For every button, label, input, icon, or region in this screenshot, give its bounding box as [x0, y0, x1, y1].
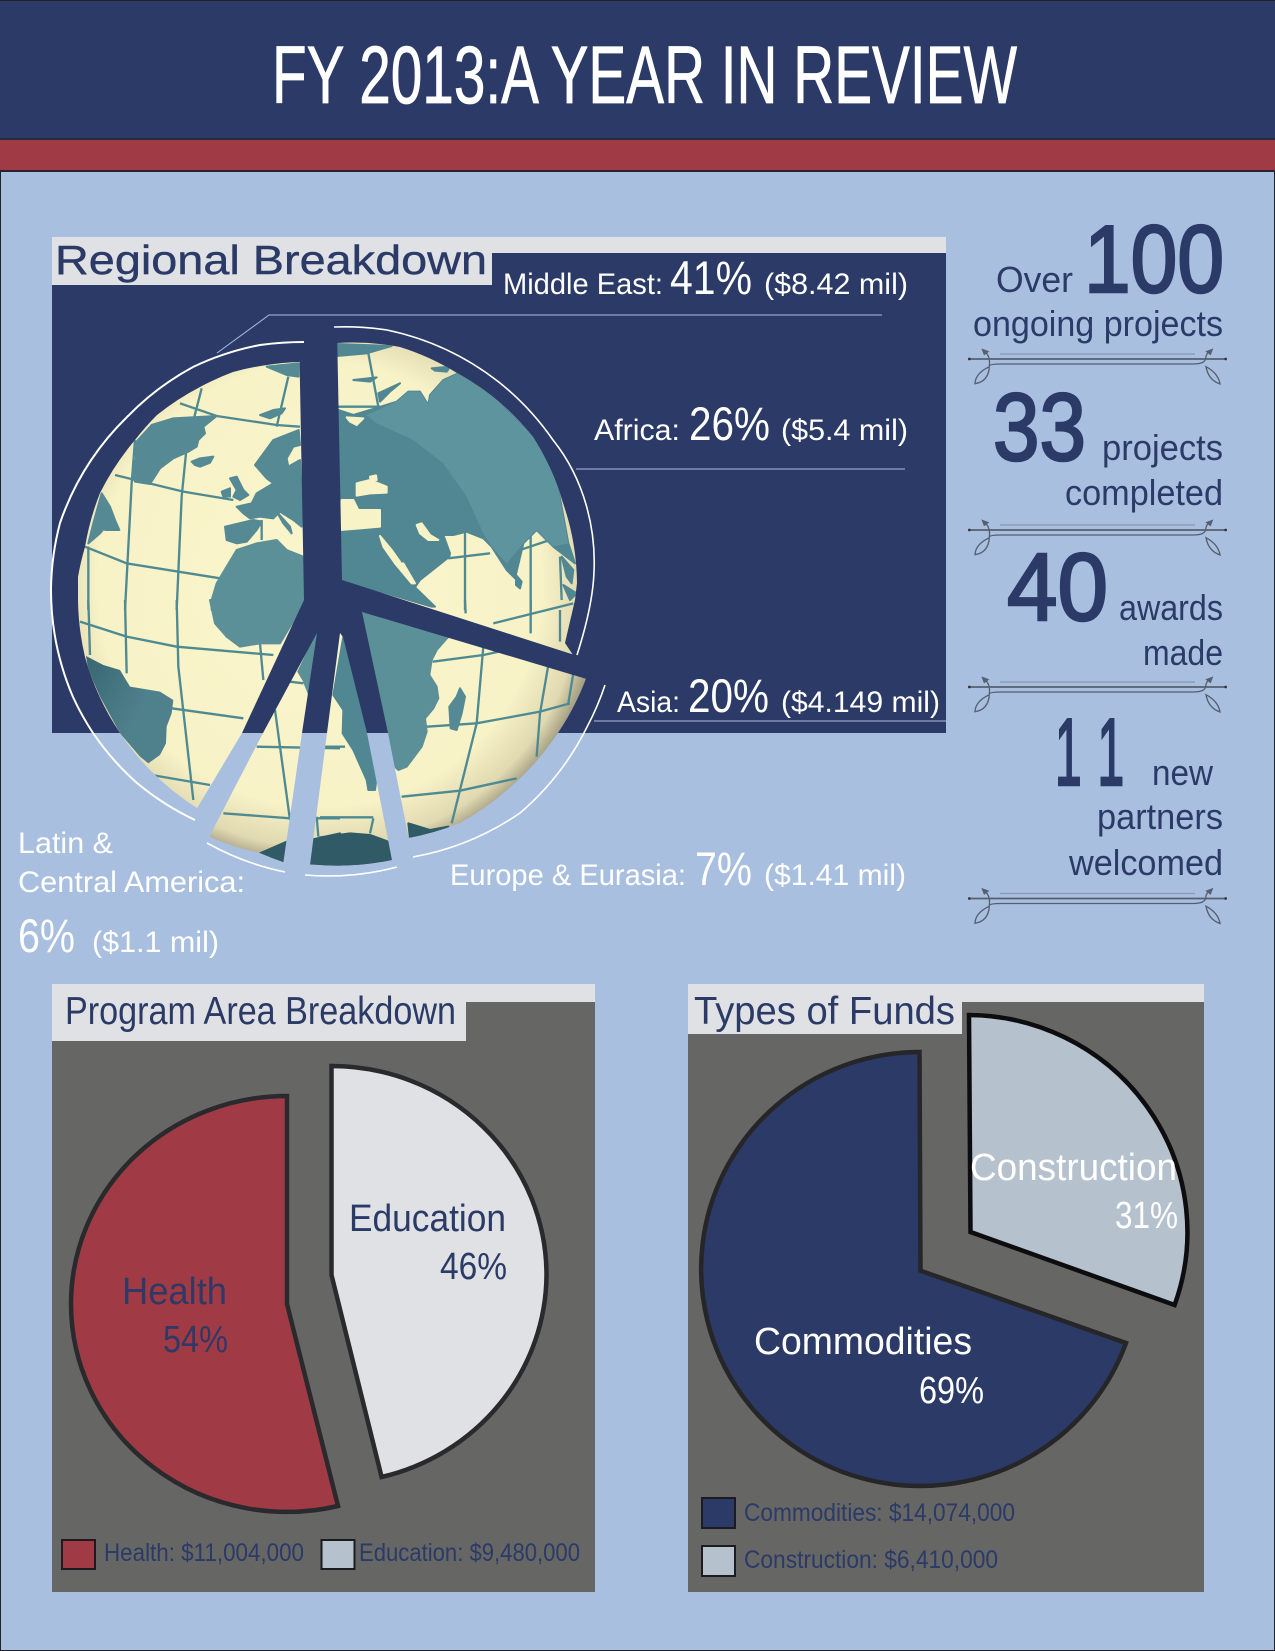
divider flourish 3: [968, 676, 1227, 712]
label: Latin and Central America: [18, 827, 245, 962]
divider flourish 1: [968, 348, 1227, 384]
pie slice: commodities: [701, 1052, 1126, 1486]
pie label: commodities: 69%: [919, 1370, 984, 1412]
divider flourish 4: [968, 888, 1227, 923]
label: Middle East: Middle East:: [503, 268, 663, 301]
legend: commodities: Commodities: $14,074,000: [744, 1499, 1015, 1527]
label: Africa: 26%: [689, 397, 770, 450]
divider flourish 2: [968, 519, 1227, 555]
pie label: construction: [970, 1147, 1178, 1237]
pie slice: health: [71, 1096, 338, 1512]
legend: construction: Construction: $6,410,000: [744, 1546, 998, 1574]
pie label: health: [122, 1271, 228, 1361]
label: Asia: ($4.149 mil): [781, 686, 940, 719]
legend: education: Education: $9,480,000: [359, 1539, 580, 1567]
label: Africa: ($5.4 mil): [781, 414, 908, 447]
pie label: construction: Construction: [970, 1147, 1177, 1189]
label: Middle East: 41%: [670, 251, 752, 304]
label: Europe and Eurasia: [450, 842, 906, 895]
callout lines: [18, 315, 946, 962]
stat: 11 new partners welcomed: [1055, 699, 1223, 883]
stat: 33 projects completed: [993, 374, 1223, 513]
label: Europe and Eurasia: Europe & Eurasia:: [450, 859, 686, 892]
legend: health: Health: $11,004,000: [104, 1539, 304, 1567]
stat: 33 projects completed: projects: [1102, 427, 1223, 468]
label: Latin and Central America: ($1.1 mil): [92, 926, 219, 959]
stat: 33 projects completed: 33: [993, 374, 1086, 481]
header band: [0, 0, 1275, 172]
stat: over 100 ongoing projects: Over: [996, 259, 1073, 300]
pie slice: construction: [969, 1015, 1187, 1305]
pie label: education: [349, 1198, 507, 1288]
label: Middle East: ($8.42 mil): [764, 268, 908, 301]
label: Latin and Central America: Central America:: [18, 866, 245, 899]
label: Asia: 20%: [688, 669, 769, 722]
stat: 40 awards made: made: [1143, 632, 1223, 673]
globe with world map: [78, 343, 587, 866]
pie slice: education: [332, 1066, 546, 1477]
label: Middle East: [503, 251, 908, 304]
stat: over 100 ongoing projects: ongoing projects: [973, 303, 1223, 344]
stat: 33 projects completed: completed: [1065, 472, 1223, 513]
globe ocean: [78, 343, 587, 866]
pie label: construction: 31%: [1115, 1195, 1178, 1237]
heading: regional breakdown: Regional Breakdown: [55, 237, 487, 283]
stat: 11 new partners welcomed: partners: [1097, 796, 1223, 837]
map: grid and continents: [80, 344, 577, 866]
peace symbol outer ring: [51, 327, 605, 876]
panel: regional breakdown background: [52, 237, 946, 733]
stat: 40 awards made: awards: [1119, 587, 1223, 628]
stat: over 100 ongoing projects: [973, 206, 1224, 344]
label: Europe and Eurasia: ($1.41 mil): [764, 859, 906, 892]
label: Asia: [617, 669, 940, 722]
label: Latin and Central America: 6%: [18, 909, 75, 962]
pie label: health: Health: [122, 1271, 227, 1313]
label: Europe and Eurasia: 7%: [695, 842, 752, 895]
stat: 11 new partners welcomed: new: [1152, 752, 1214, 793]
heading: program area breakdown: Program Area Breakdown: [65, 990, 456, 1033]
stat: 11 new partners welcomed: welcomed: [1068, 842, 1223, 883]
pie label: commodities: [754, 1321, 984, 1412]
label: Asia: Asia:: [617, 686, 680, 719]
label: Africa: [594, 397, 908, 450]
panel: program area breakdown: [52, 984, 595, 1592]
peace symbol bands: [190, 330, 590, 865]
label: Africa: Africa:: [594, 414, 680, 447]
pie label: health: 54%: [163, 1319, 228, 1361]
label: Latin and Central America: Latin &: [18, 827, 113, 860]
stat: over 100 ongoing projects: 100: [1084, 206, 1224, 313]
heading: types of funds: Types of Funds: [694, 990, 955, 1033]
stat: 40 awards made: 40: [1007, 534, 1108, 641]
stat: 11 new partners welcomed: 11: [1055, 699, 1124, 807]
pie label: education: Education: [349, 1198, 506, 1240]
pie label: commodities: Commodities: [754, 1321, 972, 1363]
pie label: education: 46%: [440, 1246, 507, 1288]
stat: 40 awards made: [1007, 534, 1223, 673]
panel: types of funds: [688, 984, 1204, 1592]
